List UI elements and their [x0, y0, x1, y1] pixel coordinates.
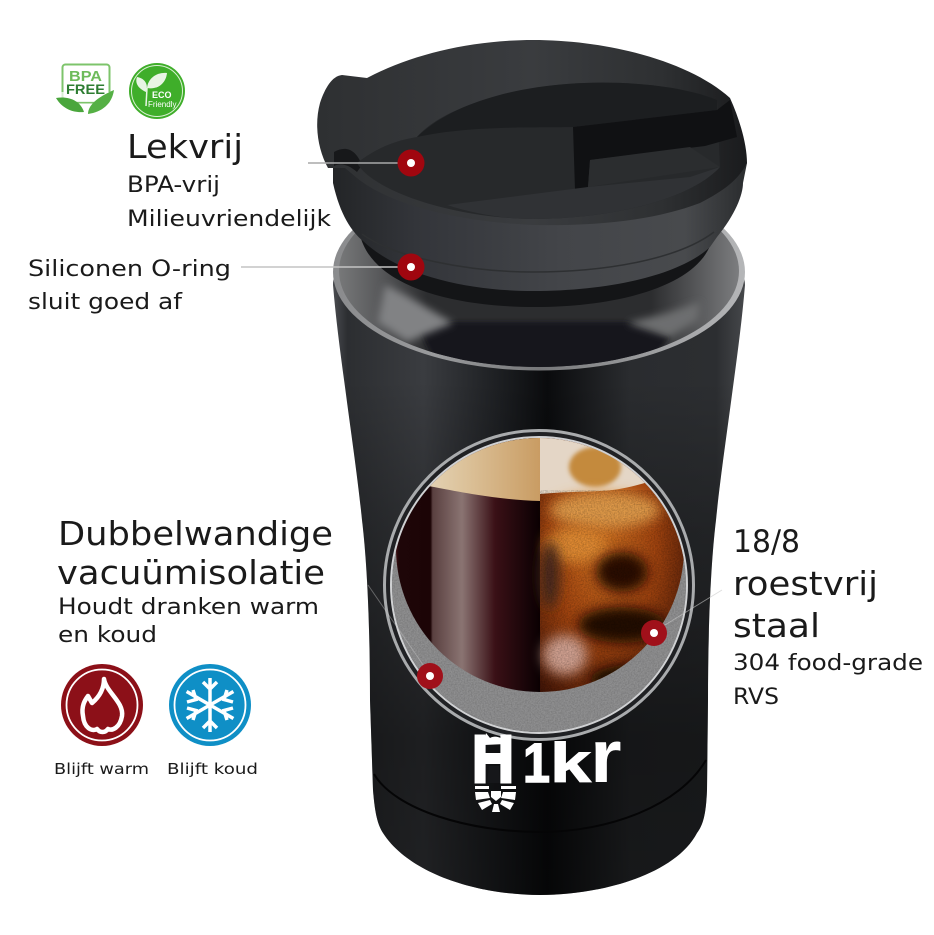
mug body shading	[333, 285, 745, 895]
text block: stainless steel	[733, 524, 923, 710]
Hikr logo	[472, 714, 622, 812]
text block: stainless steel: 304 food-grade	[733, 651, 923, 676]
marker: steel	[641, 620, 667, 646]
lid sliding plate	[447, 167, 720, 219]
lid	[317, 40, 747, 307]
heading: lekvrij: Lekvrij	[127, 127, 243, 166]
leader line: lekvrij	[308, 162, 400, 164]
lid opening panel	[417, 83, 717, 137]
marker: lid	[398, 150, 424, 176]
leader line: steel	[660, 590, 722, 628]
insulation layer	[392, 438, 686, 732]
heading: vacuum insulation: Dubbelwandige	[58, 514, 333, 553]
logo letters: 1	[523, 731, 550, 794]
marker: insulation	[417, 663, 443, 689]
logo letters: k	[550, 731, 592, 794]
icon: eco friendly badge: ECO	[152, 90, 172, 100]
label: keeps warm: Blijft warm	[54, 760, 149, 778]
mug body	[333, 221, 745, 895]
icon: keeps warm	[61, 664, 143, 746]
coffee half	[390, 430, 540, 700]
text block: vacuum insulation: en koud	[58, 623, 157, 648]
window cut-away	[384, 430, 695, 740]
icon: BPA free badge: BPA	[69, 68, 102, 85]
text block: vacuum insulation: Houdt dranken warm	[58, 595, 319, 620]
marker: o-ring	[398, 254, 424, 280]
text block: lekvrij	[127, 127, 331, 232]
lid o-ring	[360, 220, 712, 307]
text block: stainless steel: roestvrij	[733, 564, 878, 603]
leader line: o-ring	[241, 266, 400, 268]
logo letters: r	[590, 714, 622, 798]
lid band groove	[362, 232, 714, 272]
lid drink slot	[573, 100, 737, 190]
lid tab shadow	[334, 149, 362, 172]
icon: eco friendly badge	[129, 63, 185, 119]
text block: vacuum insulation: vacuümisolatie	[57, 553, 325, 592]
inner ring	[391, 437, 687, 733]
callout markers	[241, 150, 722, 689]
heading: stainless steel: 18/8	[733, 524, 800, 560]
drinks	[390, 430, 690, 700]
lid top with tab	[317, 40, 747, 225]
travel mug	[317, 40, 747, 895]
text block: lekvrij: BPA-vrij	[127, 173, 220, 198]
mug base seam	[374, 760, 706, 832]
lid outer band	[333, 140, 747, 291]
text block: o-ring	[28, 257, 231, 315]
text block: o-ring: sluit goed af	[28, 290, 183, 315]
icon: BPA free badge: FREE	[66, 81, 105, 97]
text block: vacuum insulation	[57, 514, 333, 648]
leader line: insulation	[368, 585, 428, 672]
label: keeps cold: Blijft koud	[167, 760, 258, 778]
text block: stainless steel: staal	[733, 606, 820, 645]
lid inner recess	[357, 83, 720, 219]
window metal ring	[384, 430, 694, 740]
text block: stainless steel: RVS	[733, 685, 779, 710]
lid inner plate	[588, 147, 720, 187]
logo letters	[523, 714, 622, 798]
text block: lekvrij: Milieuvriendelijk	[127, 207, 331, 232]
cola half	[540, 430, 690, 700]
logo boot sole	[475, 786, 516, 812]
text block: o-ring: Siliconen O-ring	[28, 257, 231, 282]
icon: keeps cold	[169, 664, 251, 746]
mug rim and interior	[333, 228, 745, 370]
logo H with boot shape: H	[472, 722, 514, 797]
icon: eco friendly badge: Friendly	[148, 100, 176, 109]
icon: BPA free badge	[56, 64, 114, 114]
